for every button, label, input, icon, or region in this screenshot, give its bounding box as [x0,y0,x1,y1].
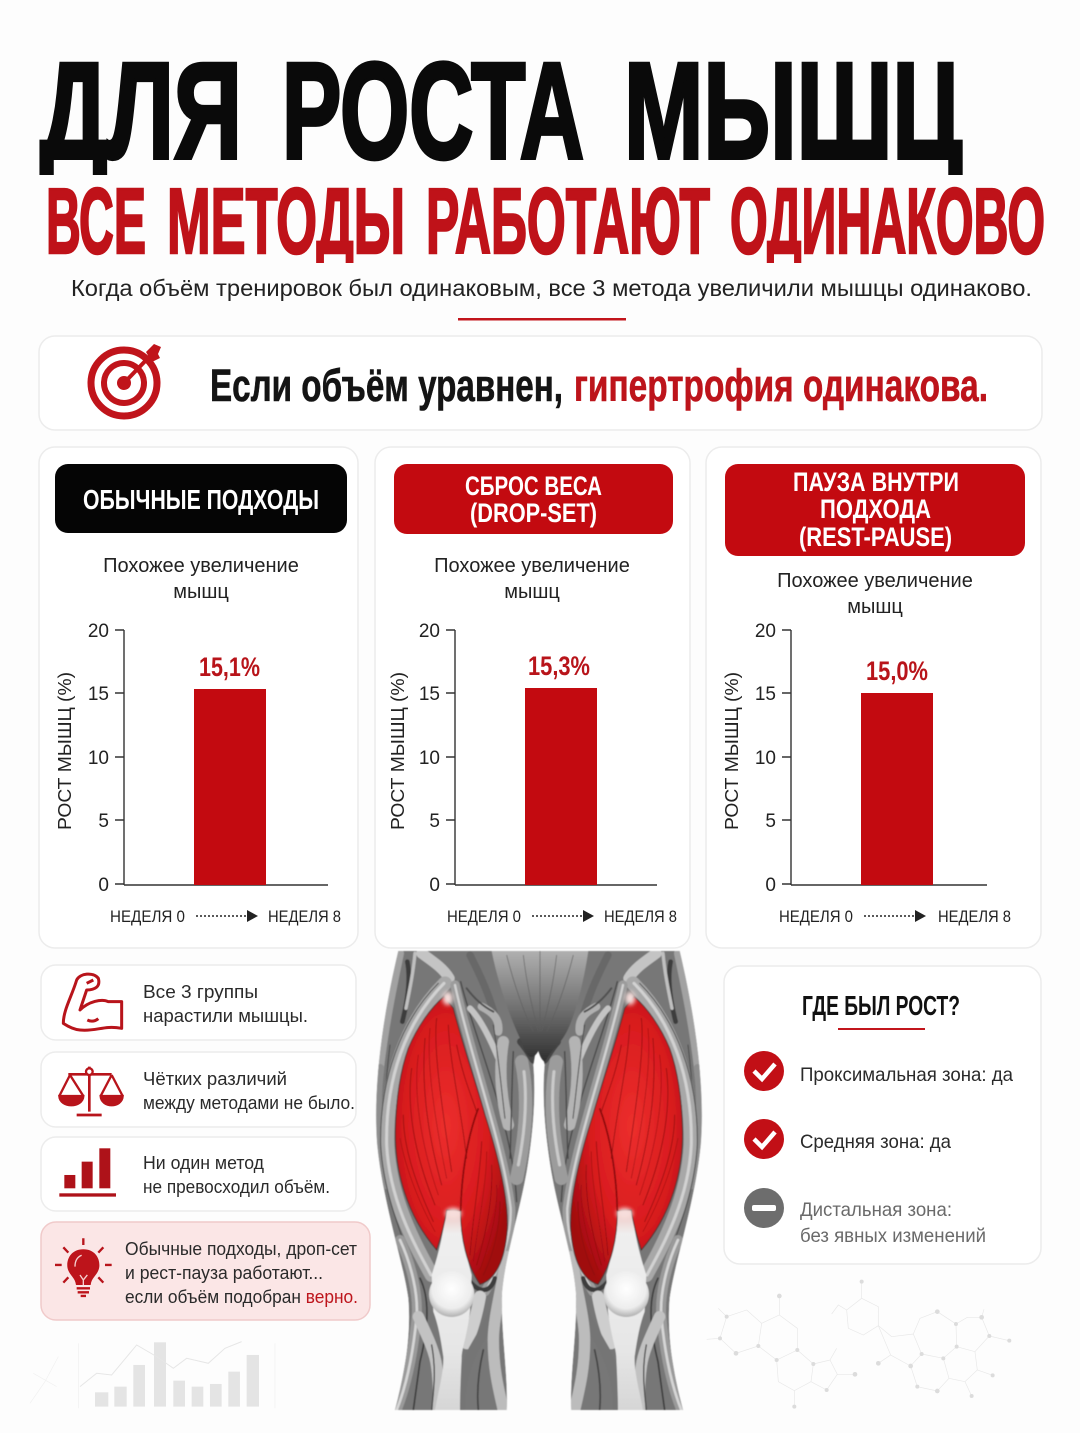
card: no differences [41,1052,356,1127]
description: мышц [173,581,229,603]
callout: conclusion [41,1222,370,1320]
heading: rest pause: ПОДХОДА [820,494,931,524]
bar chart: regular sets 15,1%: 20 [88,621,109,642]
bar chart: regular sets 15,1%: 0 [98,875,109,896]
bar chart: regular sets 15,1%: 5 [98,811,109,832]
icon: light bulb [55,1238,112,1296]
card: all groups grew [41,965,356,1040]
heading: rest pause: ПАУЗА ВНУТРИ [793,467,959,497]
icon: flexed arm [63,974,122,1030]
heading: regular sets: ОБЫЧНЫЕ ПОДХОДЫ [83,484,319,515]
bar chart: drop set 15,3%: 10 [419,748,440,769]
heading: ГДЕ БЫЛ РОСТ? [802,990,960,1021]
item: distal: без явных изменений [800,1225,986,1247]
item: middle [744,1119,951,1159]
panel: key message banner [39,336,1042,430]
card: volume: не превосходил объём. [143,1176,330,1197]
item: distal: Дистальная зона: [800,1199,952,1221]
bar chart: drop set 15,3%: 0 [429,875,440,896]
bar chart: rest pause 15,0%: НЕДЕЛЯ 8 [938,907,1011,926]
subtitle: red headline: МЕТОДЫ [167,169,405,273]
card: no differences: между методами не было. [143,1092,355,1113]
bar chart: rest pause 15,0%: 15 [755,684,776,705]
description: Похожее увеличение [103,555,299,577]
bar chart: regular sets 15,1% [55,621,341,926]
bar chart: drop set 15,3% [388,621,677,926]
muscle illustration: thighs [376,951,702,1410]
heading: regular sets [55,464,347,533]
bar chart: drop set 15,3%: 15 [419,684,440,705]
bar chart: regular sets 15,1%: НЕДЕЛЯ 0 [110,907,185,926]
heading: rest pause: (REST-PAUSE) [799,522,952,552]
heading: rest pause [725,464,1025,556]
bar chart: drop set 15,3%: НЕДЕЛЯ 8 [604,907,677,926]
heading: drop set [394,464,673,534]
callout: conclusion: Обычные подходы, дроп-сет [125,1238,357,1259]
bar chart: regular sets 15,1%: РОСТ МЫШЦ (%) [55,672,75,830]
banner text [210,360,988,411]
bar chart: regular sets 15,1%: 15 [88,684,109,705]
card: all groups grew: Все 3 группы [143,981,258,1002]
item: proximal [744,1051,1013,1091]
decorative molecules [707,1280,1011,1409]
bar chart: rest pause 15,0%: 5 [765,811,776,832]
panel: drop set [375,447,690,948]
card: volume [41,1137,356,1211]
decorative faded bar chart [30,1342,275,1408]
bar chart: drop set 15,3%: РОСТ МЫШЦ (%) [388,672,408,830]
description [434,555,630,603]
icon: bars [59,1148,116,1197]
callout: conclusion: если объём подобран верно. [125,1286,358,1307]
card: all groups grew: нарастили мышцы. [143,1005,308,1026]
panel: rest pause [706,447,1041,948]
bar chart: regular sets 15,1%: 15,1% [199,652,260,682]
title [39,60,963,175]
list: key findings [41,965,370,1320]
title: ДЛЯ [40,35,242,188]
card: volume: Ни один метод [143,1152,264,1173]
bar chart: rest pause 15,0%: 15,0% [866,656,928,686]
intro text: Когда объём тренировок был одинаковым, все 3 метода увеличили мышцы одинаково. [71,275,1032,301]
bar chart: rest pause 15,0%: 0 [765,875,776,896]
bar chart: regular sets 15,1%: НЕДЕЛЯ 8 [268,907,341,926]
icon: scales [59,1067,123,1115]
bar chart: rest pause 15,0%: НЕДЕЛЯ 0 [779,907,853,926]
bar chart: drop set 15,3%: 20 [419,621,440,642]
banner text: Если объём уравнен, [210,360,563,411]
bar chart: regular sets 15,1%: 10 [88,748,109,769]
bar chart: drop set 15,3%: НЕДЕЛЯ 0 [447,907,521,926]
title: РОСТА [282,35,584,188]
icon: target [91,344,161,416]
heading: drop set: (DROP-SET) [470,498,597,528]
description: мышц [504,581,560,603]
description: мышц [847,596,903,618]
description: Похожее увеличение [434,555,630,577]
subtitle: red headline: ВСЕ [46,169,146,273]
item: distal [744,1188,986,1247]
item: proximal: Проксимальная зона: да [800,1064,1013,1086]
bar chart: rest pause 15,0% [722,621,1011,926]
bar chart: drop set 15,3%: 5 [429,811,440,832]
panel: regular sets [39,447,358,948]
description: Похожее увеличение [777,570,973,592]
card: no differences: Чётких различий [143,1068,287,1089]
subtitle: red headline [48,186,1044,263]
heading: drop set: СБРОС ВЕСА [465,471,602,501]
callout: conclusion: и рест-пауза работают... [125,1262,323,1283]
pelvis [492,951,588,1062]
panel: where growth occurred [724,966,1041,1264]
item: middle: Средняя зона: да [800,1131,951,1153]
description [103,555,299,603]
bar chart: rest pause 15,0%: 20 [755,621,776,642]
bar chart: rest pause 15,0%: РОСТ МЫШЦ (%) [722,672,742,830]
bar chart: drop set 15,3%: 15,3% [528,651,590,681]
description [777,570,973,618]
bar chart: rest pause 15,0%: 10 [755,748,776,769]
subtitle: red headline: РАБОТАЮТ [426,169,710,273]
